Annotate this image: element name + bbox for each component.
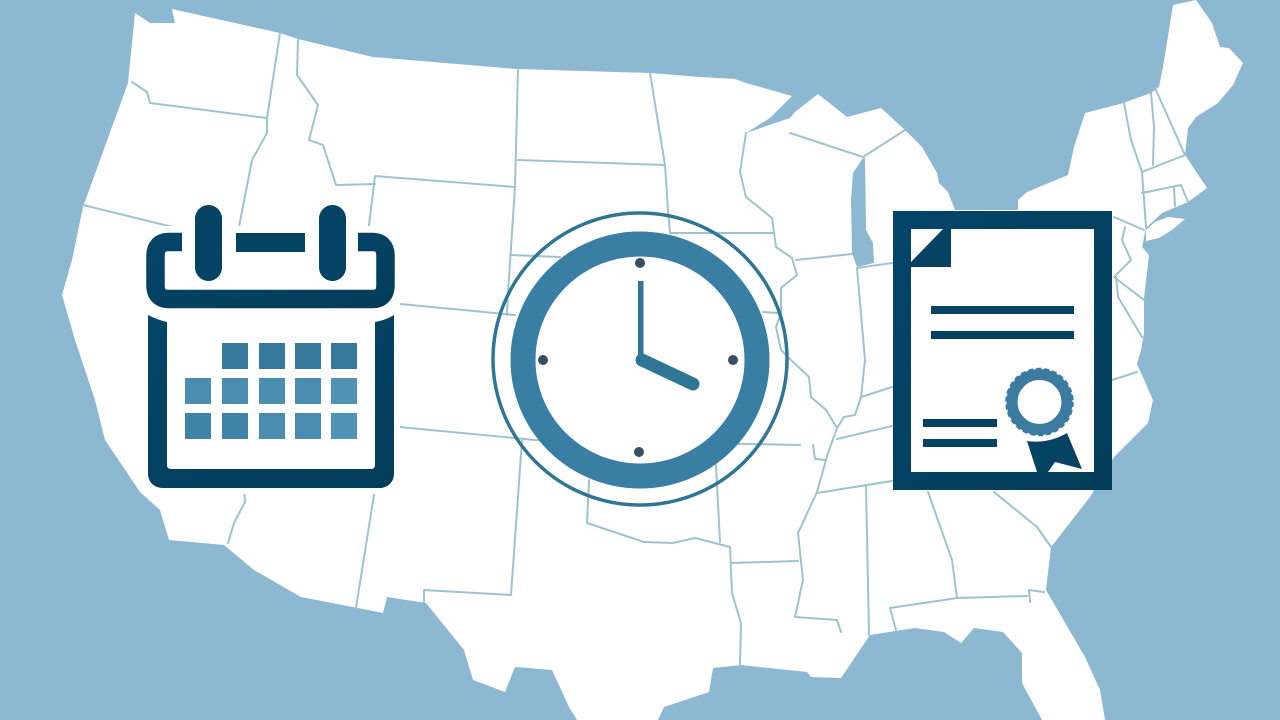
clock minute hand	[638, 281, 644, 361]
clock thick ring and face	[523, 244, 757, 476]
calendar binding bar	[236, 233, 305, 252]
calendar date grid	[185, 343, 357, 439]
certificate seal	[1006, 369, 1072, 435]
calendar white backing	[142, 226, 400, 494]
clock hour markers	[538, 258, 738, 457]
calendar body frame	[148, 315, 394, 488]
calendar right ring	[319, 205, 346, 281]
state borders	[83, 33, 1188, 665]
Lake Michigan	[851, 158, 874, 267]
icon: calendar	[142, 205, 400, 494]
calendar left ring	[195, 205, 222, 281]
calendar header frame	[156, 242, 386, 299]
clock hour hand	[642, 360, 693, 384]
certificate text lines	[923, 306, 1074, 447]
certificate frame and page	[902, 220, 1103, 481]
icon: clock	[493, 213, 787, 505]
certificate ribbon	[1027, 433, 1082, 472]
certificate folded corner	[911, 229, 951, 267]
icon: certificate	[902, 220, 1103, 481]
Long Island	[1146, 217, 1185, 241]
clock outer thin ring	[493, 213, 787, 505]
